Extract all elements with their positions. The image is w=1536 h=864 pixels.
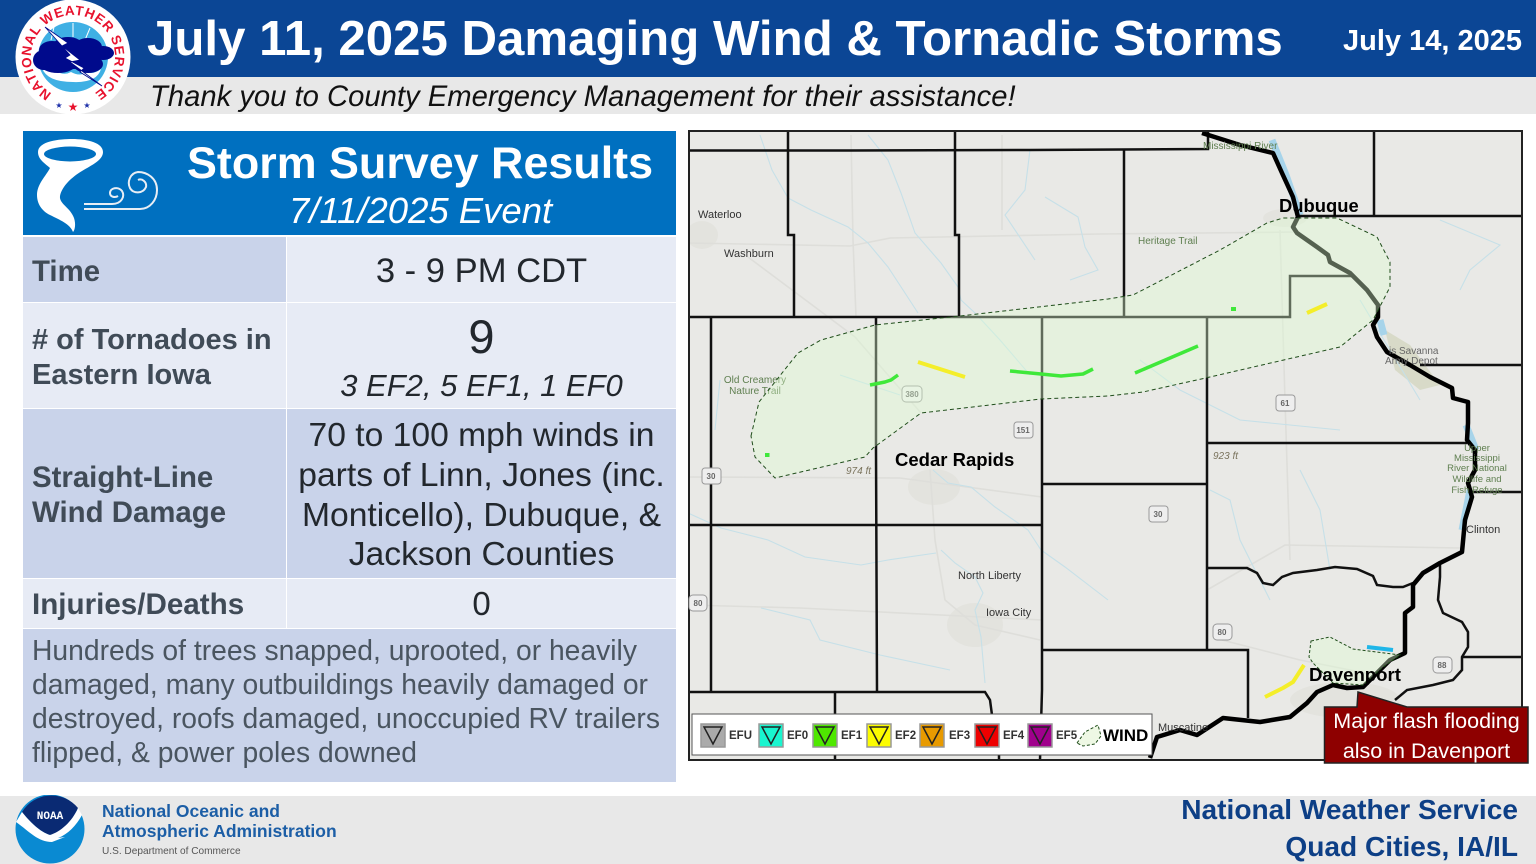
map place labels: Waterloo [698,209,742,221]
highway shields: 61 [1281,399,1290,408]
label cell: tornadoes: Eastern Iowa [32,359,211,391]
label: Dubuque: Dubuque [1279,195,1359,216]
callout: flash flooding: Major flash flooding [1333,709,1520,733]
map place labels: is Savanna [1389,346,1439,357]
damage description: Hundreds of trees snapped, uprooted, or heavily [32,634,637,666]
legend: EF3 [949,730,970,742]
label cell: tornadoes [23,303,286,408]
icon: tornado and wind [37,139,158,232]
legend [692,714,1152,755]
map place labels [698,141,1507,734]
damage description: flipped, & power poles downed [32,736,417,768]
value cell: time [287,237,676,302]
label cell: time [23,237,286,302]
NOAA name: National Oceanic and [102,801,280,821]
legend: WIND [1103,726,1148,745]
track: EF1 Dubuque County [1231,307,1236,311]
track: EF2 Jackson County [1307,304,1327,313]
map place labels: Mississippi River [1203,141,1278,152]
legend: EF0 [787,730,808,742]
map place labels: Muscatine [1158,722,1208,734]
map: storm tracks over eastern Iowa [688,130,1529,764]
Davenport wind swath [1309,637,1400,685]
label: Davenport: Davenport [1309,664,1401,685]
track: EF1 Benton County [765,453,770,457]
panel heading: Storm Survey Results [187,137,653,188]
Mississippi River state line [1150,133,1475,758]
subtitle band [0,77,1536,114]
value cell: wind damage: Jackson Counties [349,536,614,573]
tornado count number: 9 [468,310,495,363]
callout: flash flooding [1324,692,1528,763]
icon: NOAA logo [16,795,84,864]
NOAA name: Atmospheric Administration [102,821,337,841]
highway shields: 380 [905,390,919,399]
map place labels: Clinton [1466,524,1500,536]
subtitle: thank you note: Thank you to County Emergency Management for their assistance! [150,81,1016,113]
value cell: wind damage: parts of Linn, Jones (inc. [298,457,665,494]
icon: National Weather Service logo: NATIONAL WEATHER SERVICE [22,6,124,100]
value cell: injuries: 0 [472,585,491,622]
map place labels: River National [1447,463,1507,474]
value cell: time: 3 - 9 PM CDT [376,252,587,290]
title: July 11, 2025 Damaging Wind & Tornadic Storms [147,11,1283,66]
label cell: wind damage: Wind Damage [32,496,226,529]
office name: National Weather Service [1181,794,1518,825]
track: EF2 Davenport [1265,665,1304,697]
highway shields: 30 [707,472,716,481]
highway shields: 30 [1154,510,1163,519]
row: injuries and deaths [23,579,676,628]
map place labels: Wildlife and [1452,474,1502,485]
wind damage swath [751,218,1390,478]
track: EF0 Davenport [1367,647,1393,650]
track: EF1 near Linn county line [870,375,898,385]
highway shields: 88 [1438,661,1447,670]
footer band [0,796,1536,864]
office name [1181,794,1518,862]
track: EF1 Jones County [1010,369,1093,376]
highway shields: 151 [1016,426,1030,435]
map place labels: Iowa City [986,607,1032,619]
damage description: destroyed, roofs damaged, unoccupied RV trailers [32,702,660,734]
track: EF1 Jones County east [1135,346,1198,373]
label cell: injuries: Injuries/Deaths [32,588,244,621]
icon: National Weather Service logo: ★ [83,101,91,110]
value cell: tornado count [287,303,676,408]
date: July 14, 2025 [1343,25,1522,57]
county boundaries [689,131,1521,760]
NOAA name [102,801,337,841]
damage description [23,629,676,782]
office name: Quad Cities, IA/IL [1285,831,1518,862]
row: tornadoes [23,303,676,408]
map place labels: North Liberty [958,570,1021,582]
icon: National Weather Service logo: ★ [55,101,63,110]
map place labels: Heritage Trail [1138,236,1197,247]
map place labels: Fish Refuge [1451,485,1503,496]
label cell: injuries [23,579,286,628]
value cell: wind damage: Monticello), Dubuque, & [302,497,661,534]
legend: EF5 [1056,730,1078,742]
value cell: wind damage [287,409,676,578]
icon: National Weather Service logo: ★ [68,100,78,114]
map place labels: Mississippi [1454,453,1500,464]
panel: storm survey results [23,131,676,782]
department of commerce: U.S. Department of Commerce [102,846,241,857]
legend: EF4 [1003,730,1025,742]
panel subheading: 7/11/2025 Event [289,190,552,231]
row: straight-line wind damage [23,409,676,578]
callout: flash flooding: also in Davenport [1343,739,1510,763]
label: Cedar Rapids: Cedar Rapids [895,449,1014,470]
icon: NOAA logo: NOAA [37,811,64,823]
value cell: wind damage: 70 to 100 mph winds in [309,417,654,454]
damage description: damaged, many outbuildings heavily damaged or [32,668,648,700]
header bar [0,0,1536,77]
highway shields [689,386,1452,673]
value cell: injuries [287,579,676,628]
map place labels: 974 ft [846,466,872,477]
map place labels: Nature Trail [729,386,781,397]
label cell: tornadoes: # of Tornadoes in [32,324,272,356]
highway shields: 80 [694,599,703,608]
label cell: time: Time [32,255,100,288]
row: time [23,237,676,302]
label cell: wind damage: Straight-Line [32,461,213,494]
highway shields: 80 [1218,628,1227,637]
legend: EF1 [841,730,863,742]
panel header background [23,131,676,235]
track: EF2 Linn County [918,362,965,377]
map place labels: Old Creamery [724,375,786,386]
tornado tracks [765,304,1393,697]
map place labels: Washburn [724,248,774,260]
legend: EFU [729,730,752,742]
label cell: wind damage [23,409,286,578]
map place labels: Upper [1464,443,1490,454]
map place labels: Army Depot [1385,356,1438,367]
legend: EF2 [895,730,916,742]
map frame [689,131,1522,760]
tornado rating breakdown: 3 EF2, 5 EF1, 1 EF0 [340,368,623,403]
map place labels: 923 ft [1213,451,1239,462]
